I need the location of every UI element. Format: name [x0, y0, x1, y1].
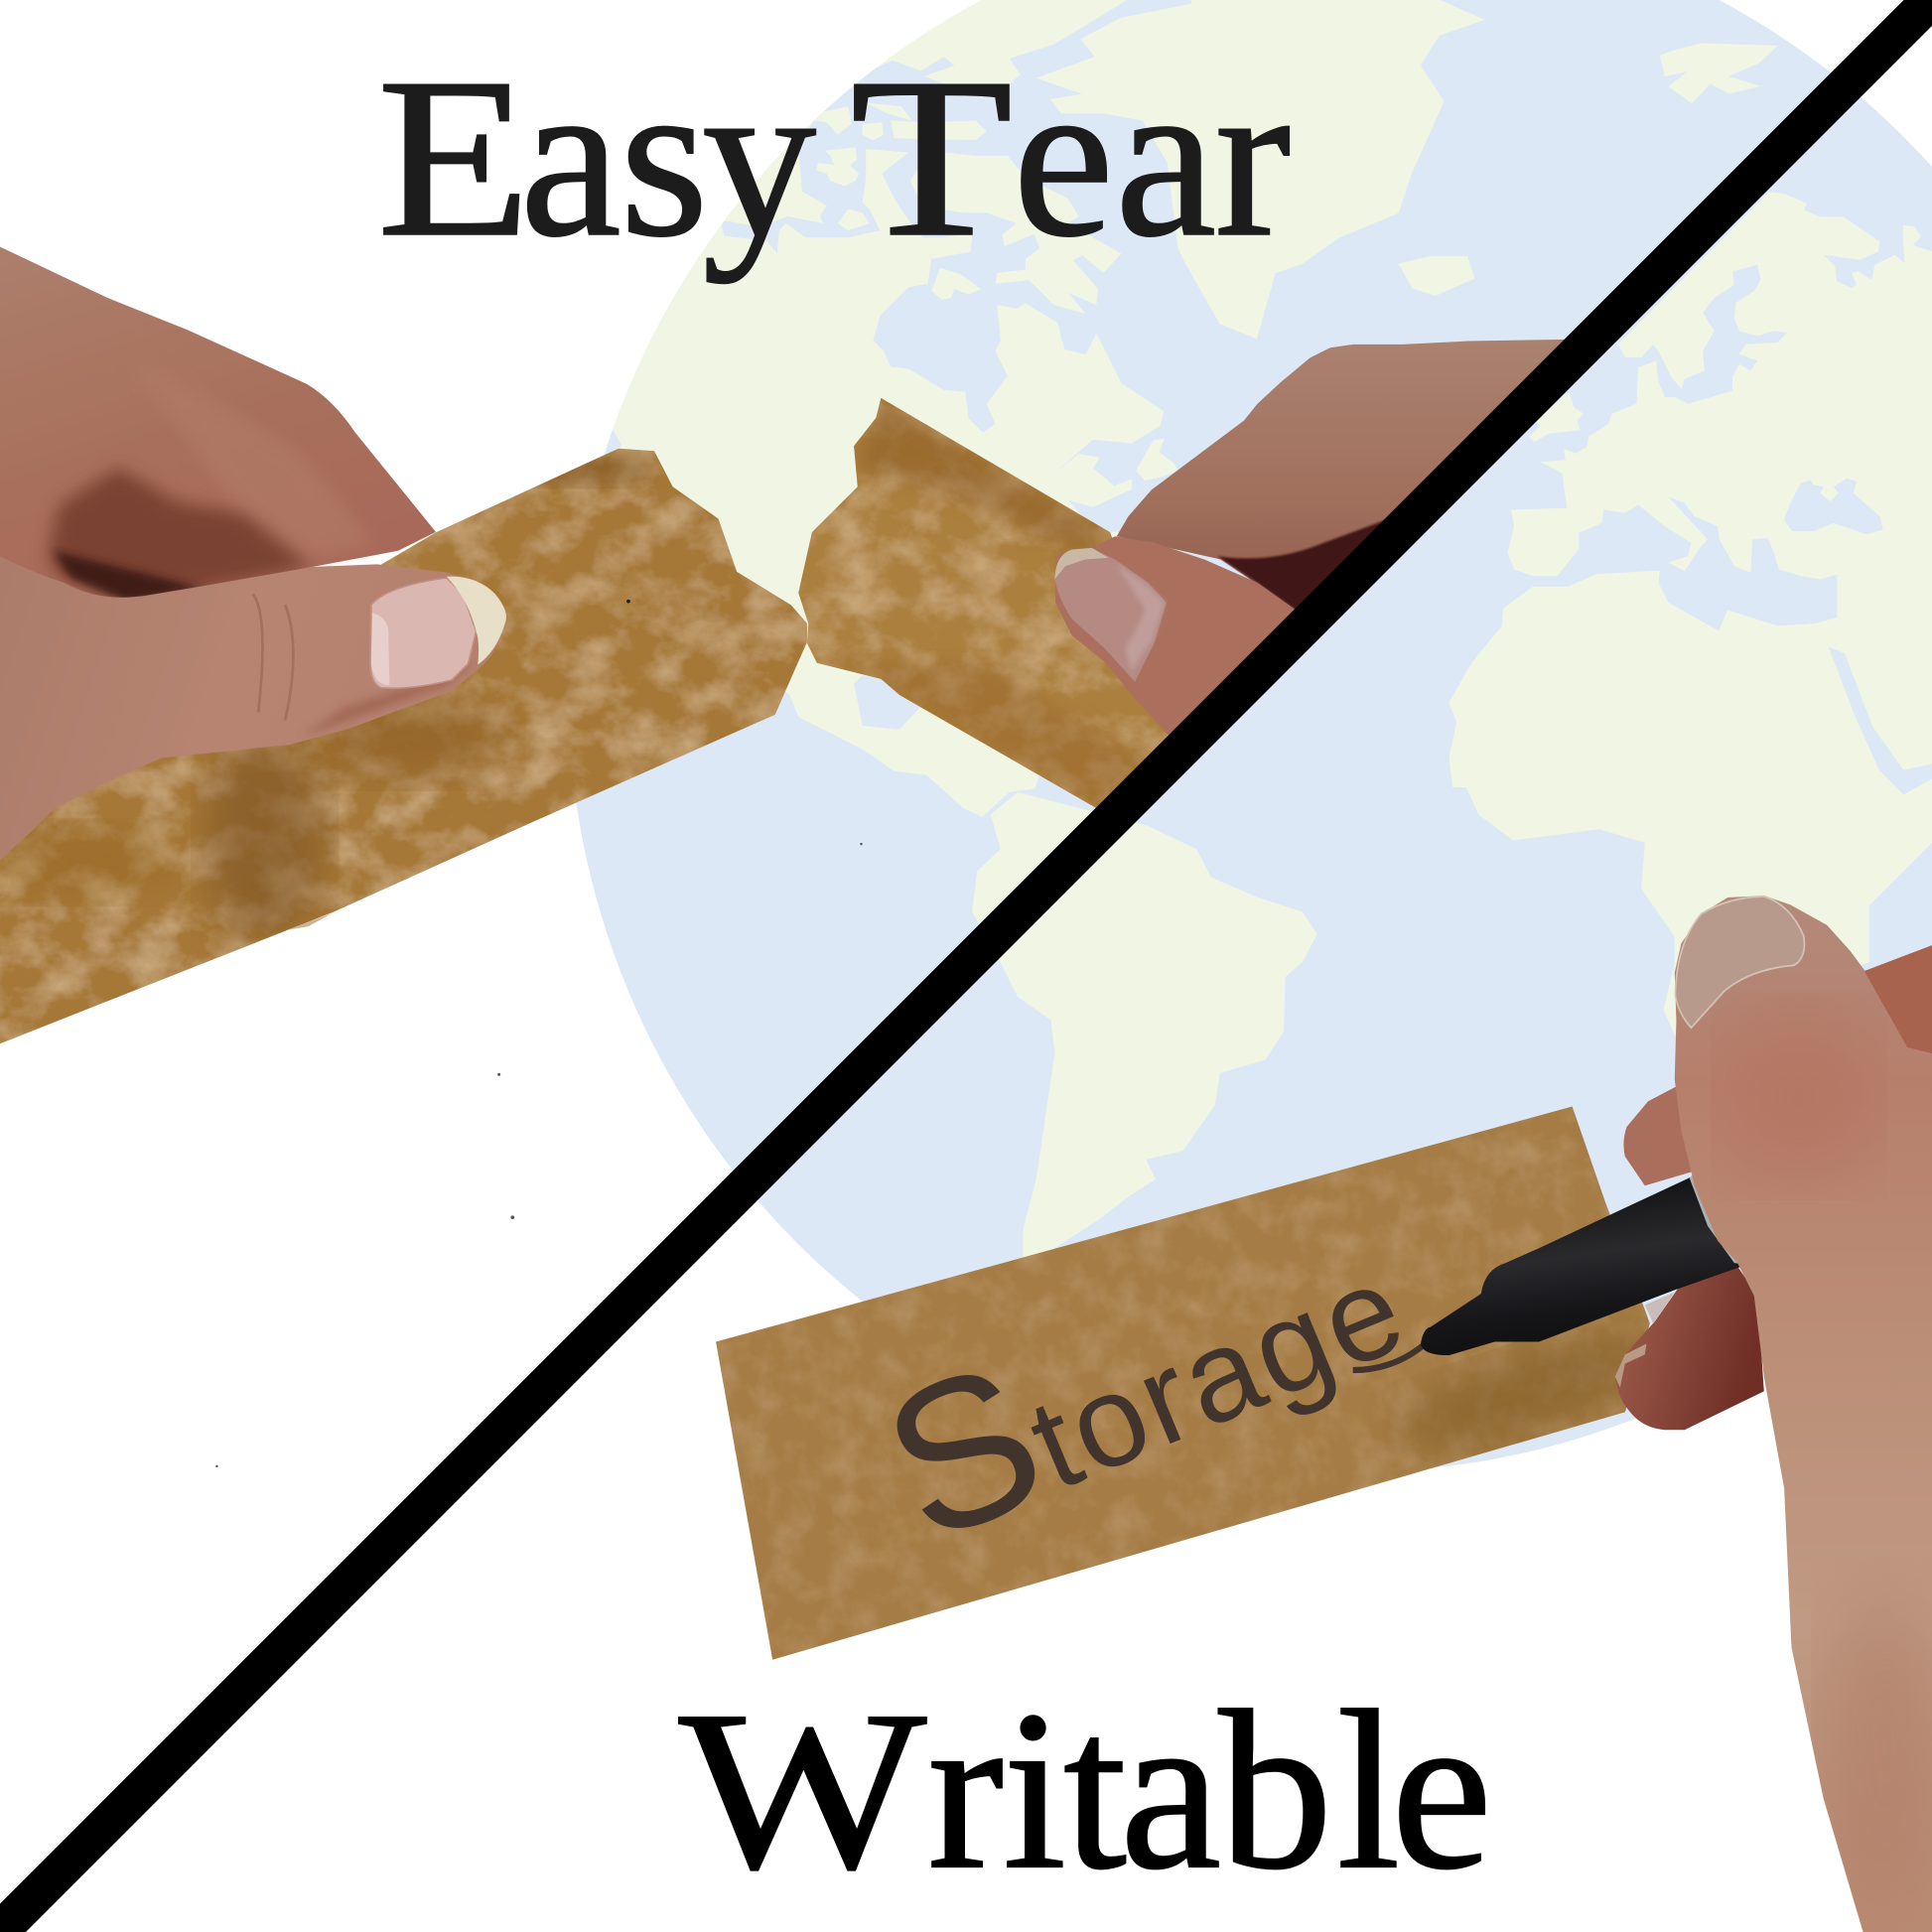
back of hand and index finger	[0, 247, 436, 600]
handwriting: Storage	[854, 1167, 1432, 1587]
Black Sea	[1784, 479, 1883, 534]
deep shadow between finger and thumb	[1217, 520, 1386, 611]
knuckle creases	[253, 594, 293, 721]
pen grey ring	[1690, 1168, 1744, 1265]
stray specks	[215, 843, 863, 1467]
land: North America and Greenland	[612, 0, 1484, 817]
title: Easy Tear: E	[377, 31, 531, 284]
hand: right, pinching tape	[1054, 340, 1572, 739]
hand: thumb and wrist holding pen	[1675, 896, 1932, 1932]
nail moon	[371, 613, 389, 685]
thumb	[1055, 536, 1297, 739]
hand: left, pinching tape	[0, 247, 506, 860]
index finger	[1117, 340, 1572, 616]
title: Easy Tear: ear	[1013, 31, 1291, 284]
land: Africa and Arabia	[1449, 567, 1932, 1035]
Red Sea	[1829, 647, 1932, 794]
lower finger behind pen	[1615, 1267, 1764, 1430]
lower finger nail edge	[1615, 1343, 1646, 1388]
paper gap	[1645, 1293, 1675, 1323]
land: British Isles	[1529, 392, 1584, 442]
land: Newfoundland	[1136, 439, 1177, 481]
ocean	[568, 0, 1932, 1472]
arctic waters, Hudson Bay and Labrador Sea	[721, 0, 1191, 532]
nail tip	[447, 577, 506, 665]
gap between fingers	[49, 468, 312, 602]
title: Easy Tear: T	[850, 31, 1013, 284]
globe map	[492, 0, 1932, 1472]
land: Europe and Asia	[1507, 192, 1932, 612]
land: South America	[972, 792, 1317, 1269]
upper finger behind pen	[1623, 1086, 1695, 1185]
arctic islands	[813, 103, 1121, 314]
thumb	[0, 556, 506, 860]
land: Svalbard	[1660, 43, 1778, 103]
title: Writable: W	[679, 1663, 927, 1916]
torn kraft tape: right piece	[798, 398, 1182, 808]
thumb nail	[370, 578, 477, 688]
title: Easy Tear: asy	[520, 31, 816, 284]
thumb nail	[1675, 897, 1804, 1028]
thumb lower shade	[302, 658, 479, 737]
index finger light band	[129, 357, 376, 562]
nail highlight	[1115, 563, 1165, 672]
title: Writable: ritable	[928, 1663, 1492, 1916]
nail tip	[1054, 548, 1108, 580]
pen tail stroke	[1353, 1345, 1423, 1370]
rim water	[604, 430, 621, 455]
marker pen	[1421, 1168, 1744, 1355]
land: Iceland	[1399, 256, 1475, 296]
kraft label	[716, 1106, 1670, 1660]
torn kraft tape: left piece	[0, 449, 807, 1043]
thumb nail	[1054, 548, 1167, 682]
hand holding pen	[1615, 1086, 1764, 1430]
gulf of Mexico	[854, 675, 921, 730]
deep shadow under thumb	[54, 551, 205, 602]
